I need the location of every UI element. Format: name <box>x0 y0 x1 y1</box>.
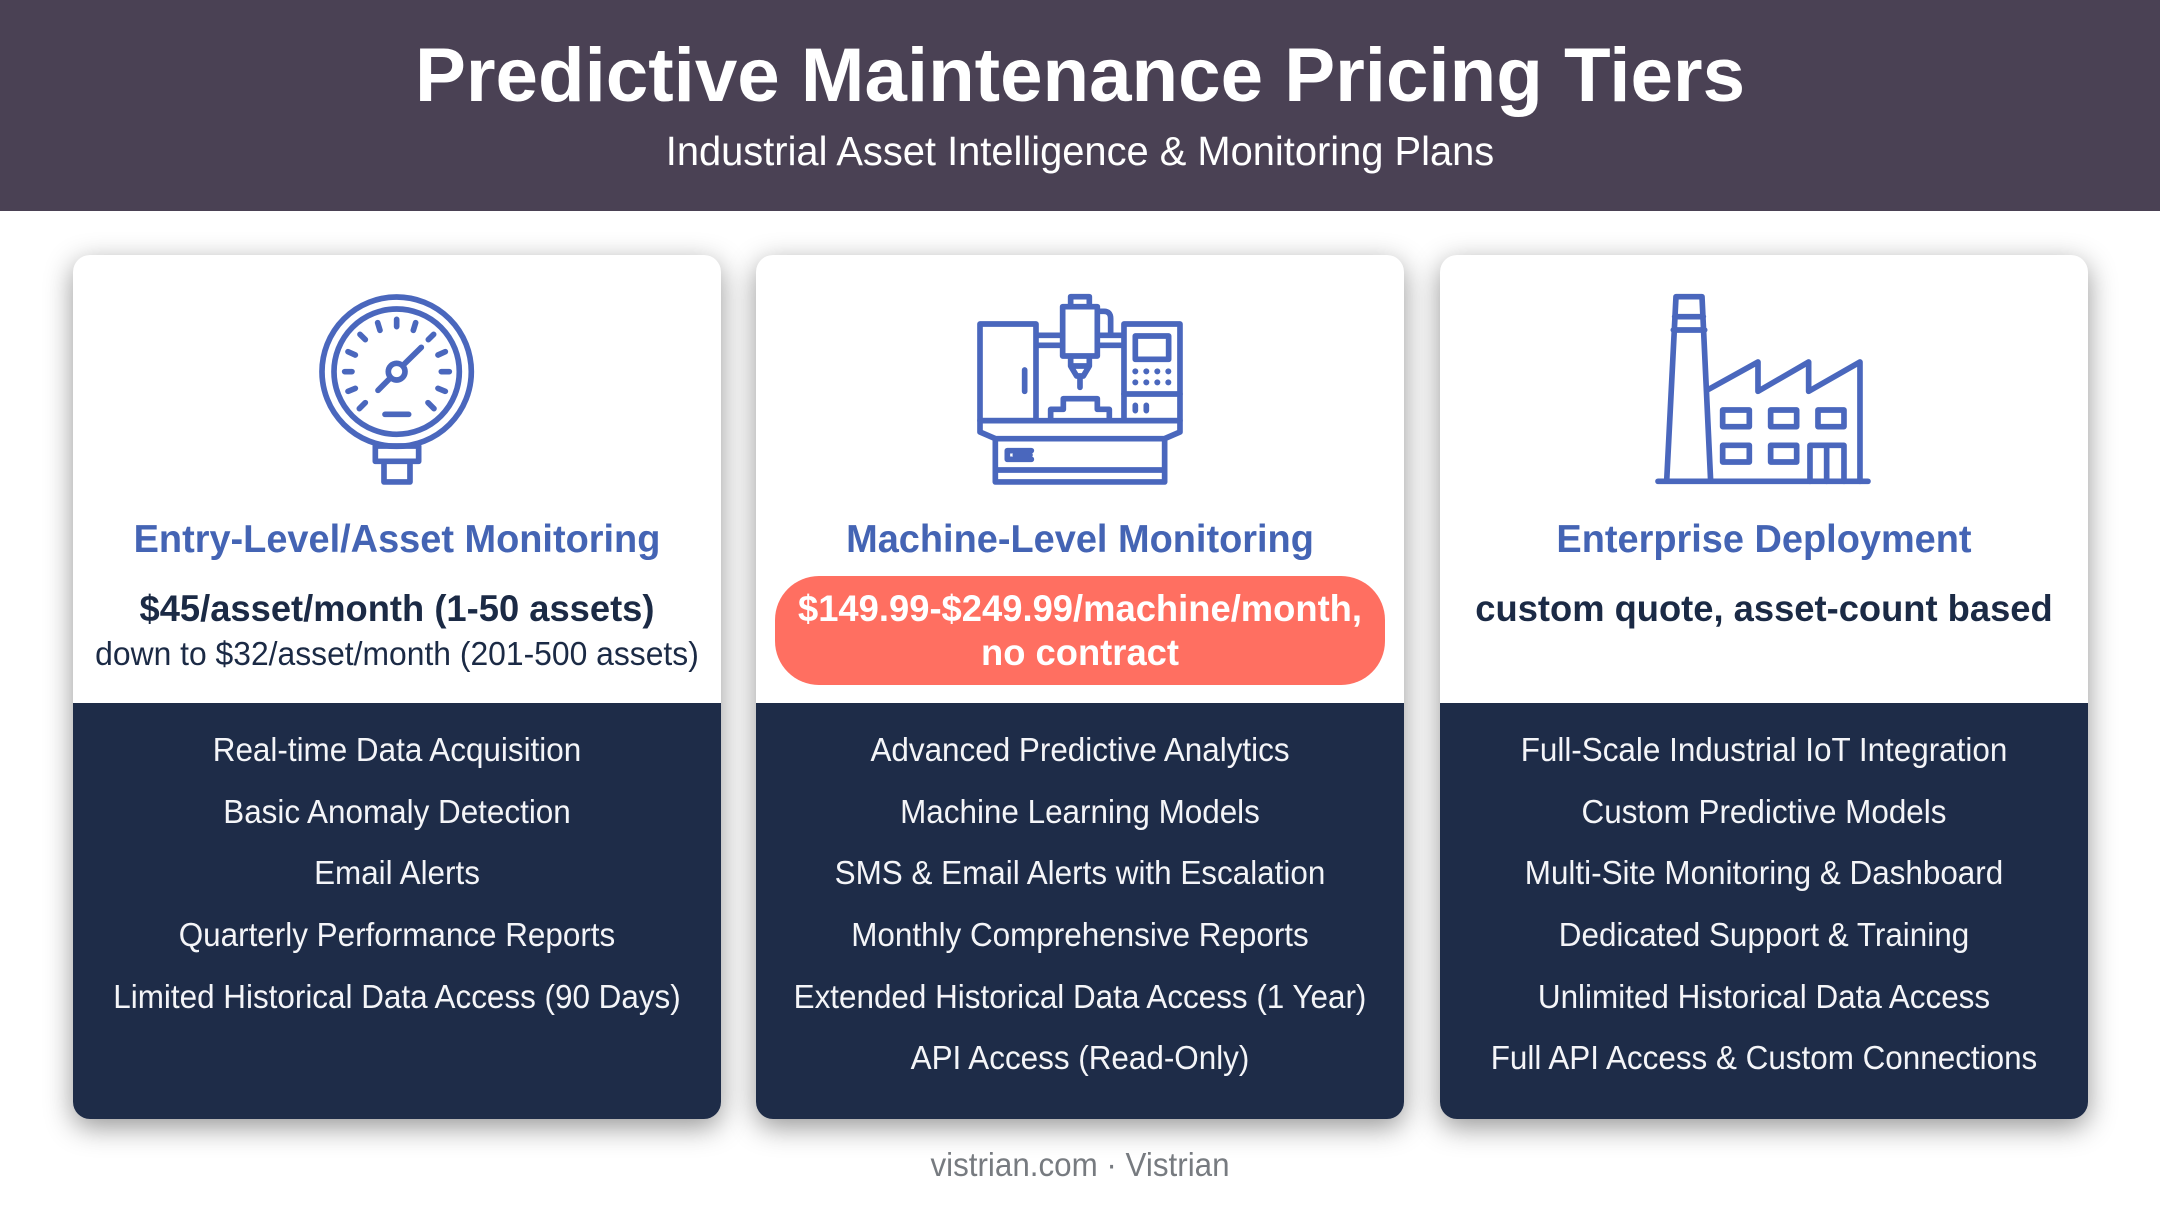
subtitle: Industrial Asset Intelligence & Monitoring Plans <box>666 128 1494 174</box>
feature list <box>756 703 1404 1119</box>
feature list: Multi-Site Monitoring & Dashboard <box>1525 854 2003 891</box>
feature list: Full-Scale Industrial IoT Integration <box>1521 731 2007 768</box>
icon: pressure gauge <box>319 294 474 485</box>
icon: factory <box>1655 294 1871 484</box>
heading: Entry-Level/Asset Monitoring <box>134 518 660 561</box>
feature list: Dedicated Support & Training <box>1559 916 1969 952</box>
feature list: Advanced Predictive Analytics <box>870 731 1290 768</box>
feature list: Basic Anomaly Detection <box>223 792 571 830</box>
feature list: API Access (Read-Only) <box>911 1038 1249 1076</box>
feature list <box>73 703 721 1119</box>
feature list: Real-time Data Acquisition <box>213 731 581 768</box>
price note: down to $32/asset/month (201-500 assets) <box>95 635 699 672</box>
price: $45/asset/month (1-50 assets) <box>140 588 654 629</box>
price pill <box>775 576 1385 685</box>
feature list: Custom Predictive Models <box>1582 792 1946 830</box>
feature list: Full API Access & Custom Connections <box>1491 1038 2037 1076</box>
price: custom quote, asset-count based <box>1475 588 2053 629</box>
feature list: SMS & Email Alerts with Escalation <box>835 854 1325 891</box>
icon: CNC machine <box>977 294 1183 485</box>
feature list: Email Alerts <box>314 854 480 891</box>
feature list: Quarterly Performance Reports <box>179 916 615 952</box>
panel: enterprise <box>1440 255 2088 1119</box>
feature list: Machine Learning Models <box>900 792 1260 830</box>
feature list <box>1440 703 2088 1119</box>
footer: vistrian.com · Vistrian <box>930 1146 1230 1183</box>
price line 2: no contract <box>981 632 1179 673</box>
panel: machine-level <box>756 255 1404 1119</box>
feature list: Monthly Comprehensive Reports <box>851 916 1309 952</box>
feature list: Limited Historical Data Access (90 Days) <box>113 978 681 1014</box>
panel: entry-level <box>73 255 721 1119</box>
feature list: Extended Historical Data Access (1 Year) <box>794 978 1366 1014</box>
feature list: Unlimited Historical Data Access <box>1538 978 1990 1014</box>
header banner <box>0 0 2160 211</box>
heading: Enterprise Deployment <box>1556 518 1972 561</box>
price: $149.99-$249.99/machine/month, <box>798 588 1362 629</box>
heading: Machine-Level Monitoring <box>846 518 1314 561</box>
title: Predictive Maintenance Pricing Tiers <box>415 33 1745 118</box>
